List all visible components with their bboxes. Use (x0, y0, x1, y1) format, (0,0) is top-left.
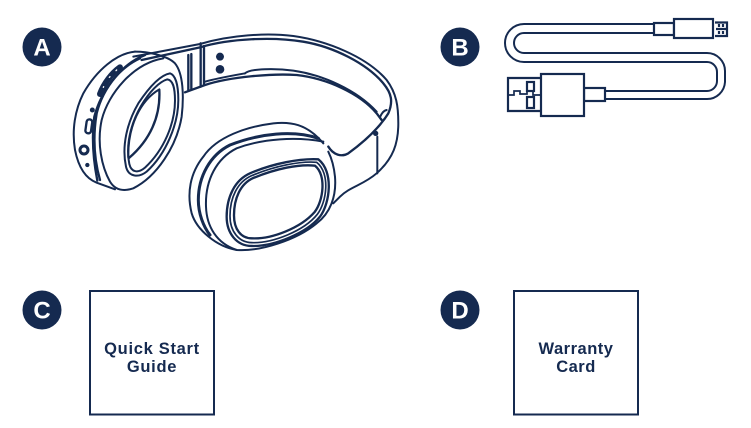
side buttons (100, 67, 120, 94)
headband (133, 35, 398, 203)
badge C (22, 290, 62, 330)
USB-A connector (508, 74, 605, 116)
panel: Quick Start Guide: Guide (127, 358, 177, 376)
panel: Warranty Card (514, 291, 638, 414)
panel: Warranty Card: Card (556, 358, 596, 376)
illustration: USB cable (505, 19, 727, 116)
illustration: headphones (74, 35, 398, 250)
badge D: D (451, 298, 469, 324)
right ear cup (189, 123, 335, 250)
badge A: A (33, 34, 51, 62)
panel: Warranty Card: Warranty (539, 340, 614, 358)
cable outer and inner lines (505, 24, 717, 91)
badge C: C (33, 298, 51, 324)
badge D (440, 290, 480, 330)
left ear cup (74, 52, 183, 190)
badge B (440, 28, 480, 66)
panel: Quick Start Guide: Quick Start (104, 340, 200, 358)
micro USB connector (654, 19, 727, 38)
badge A (22, 28, 62, 66)
badge B: B (451, 34, 469, 62)
panel: Quick Start Guide (90, 291, 214, 414)
